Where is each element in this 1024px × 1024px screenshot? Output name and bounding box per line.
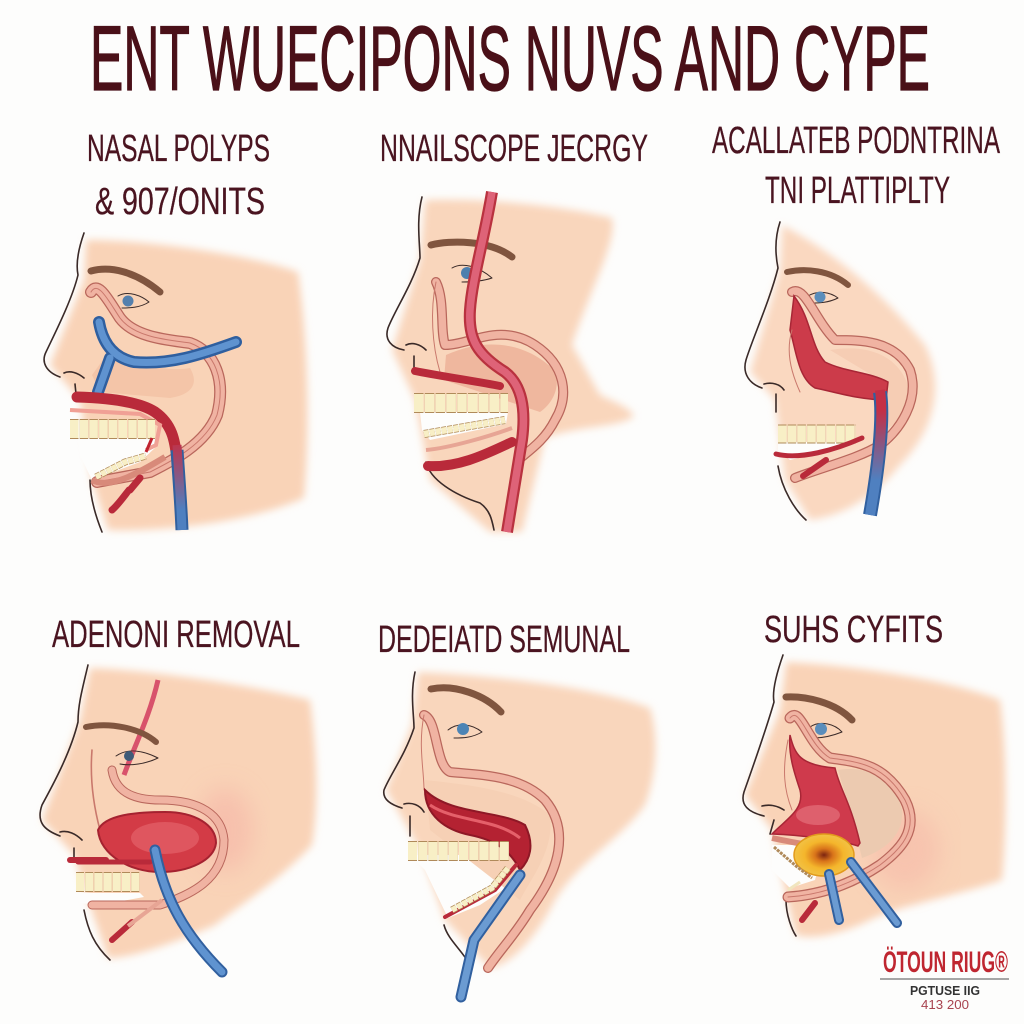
- heading: dedeiatd semunal: DEDEIATD SEMUNAL: [378, 619, 630, 661]
- panel: nnailscope jecrgy: [380, 128, 648, 532]
- panel: acallated podntrina: [712, 120, 1000, 520]
- illustration: face with red adenoid mass: [40, 665, 316, 972]
- heading: nasal polyps: & 907/ONITS: [95, 181, 265, 223]
- heading: suhs cyfits: SUHS CYFITS: [764, 609, 943, 651]
- panel: adenoni removal: [40, 614, 316, 972]
- heading: nasal polyps: [87, 128, 270, 223]
- heading: acallated podntrina: [712, 120, 1000, 212]
- heading: nasal polyps: NASAL POLYPS: [87, 128, 270, 170]
- logo: otoun riug: 413 200: [921, 997, 969, 1012]
- panel: suhs cyfits: [743, 609, 1006, 937]
- illustration: face with red cavity, tumour and two tubes: [743, 655, 1006, 937]
- illustration: face with dark red passage and blue tube: [384, 672, 655, 997]
- logo: otoun riug: PGTUSE IIG: [910, 983, 980, 998]
- logo: otoun riug: [880, 946, 1009, 1012]
- panel: nasal polyps: [44, 128, 307, 532]
- illustration: face with blue and red tubes: [44, 233, 307, 532]
- panel: dedeiatd semunal: [378, 619, 655, 997]
- illustration: face with red scope: [387, 192, 634, 532]
- illustration: face with red cavity: [745, 222, 935, 520]
- heading: adenoni removal: ADENONI REMOVAL: [52, 614, 300, 656]
- heading: nnailscope jecrgy: NNAILSCOPE JECRGY: [380, 128, 648, 170]
